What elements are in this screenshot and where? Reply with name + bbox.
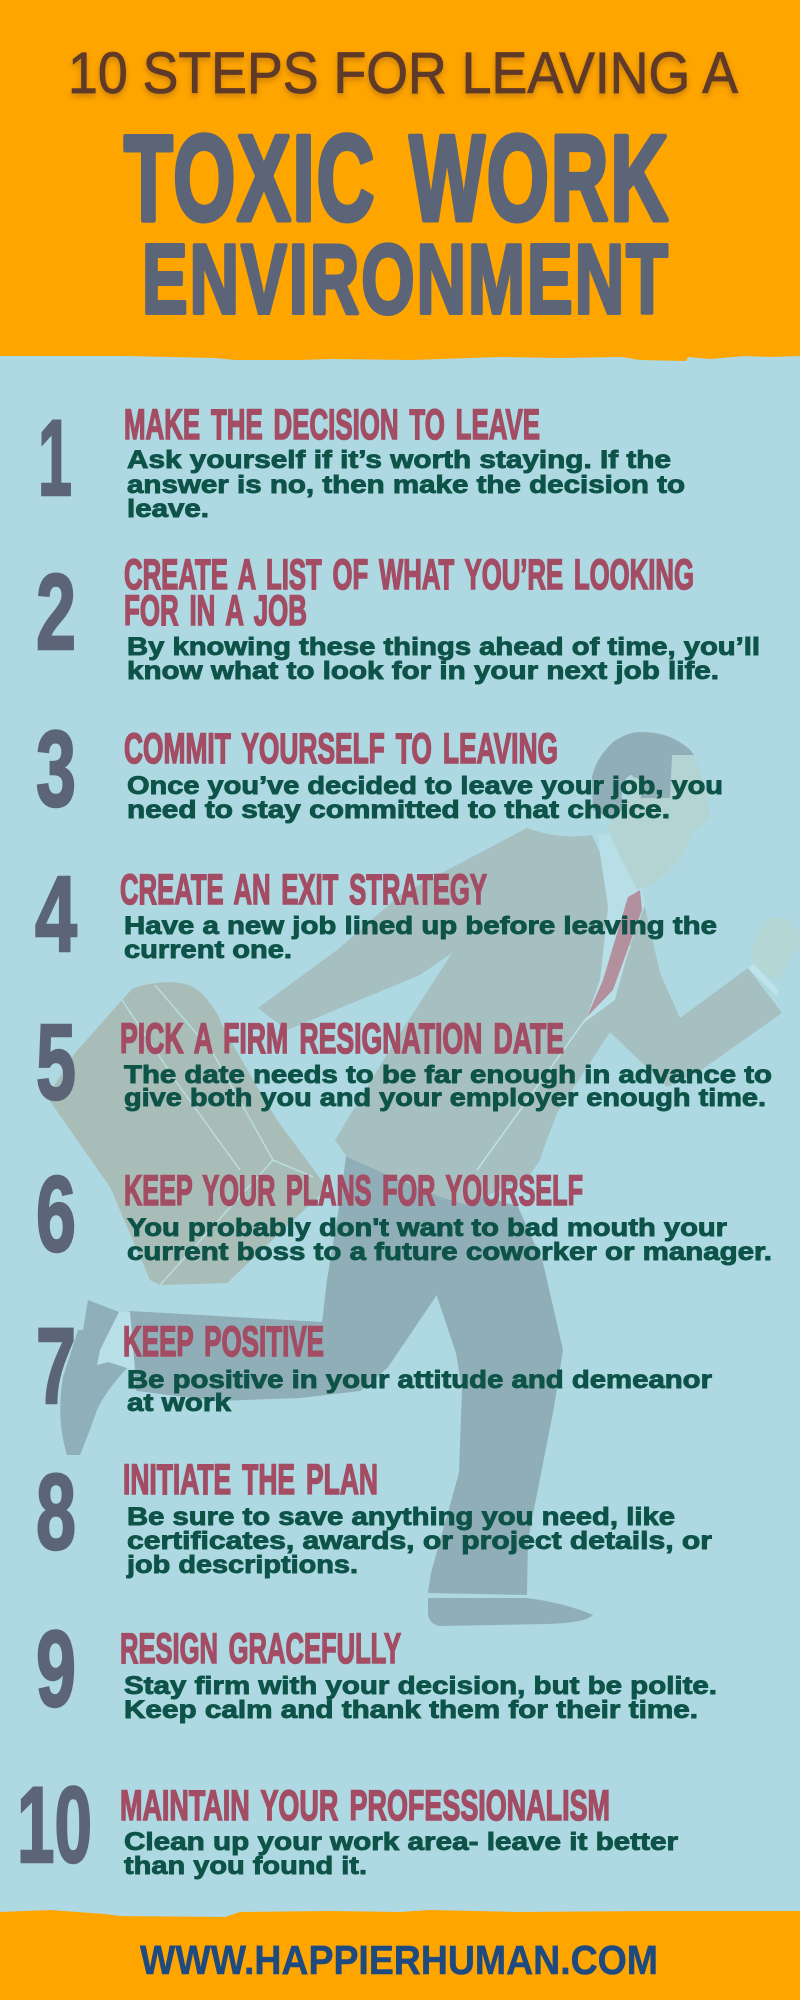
- step text: need to stay committed to that choice.: [127, 796, 670, 824]
- jacket: [258, 828, 782, 1205]
- step text: Keep calm and thank them for their time.: [124, 1696, 698, 1724]
- step text: answer is no, then make the decision to: [127, 471, 685, 499]
- step number: 3: [36, 708, 76, 829]
- title line: 10 steps: 10 STEPS FOR LEAVING A: [68, 41, 738, 106]
- step text: Stay firm with your decision, but be polite.: [124, 1672, 717, 1700]
- step 8: [36, 1451, 712, 1579]
- step text: current one.: [124, 936, 292, 964]
- step heading: [124, 551, 694, 635]
- step 10: [17, 1764, 678, 1885]
- step number: 8: [36, 1451, 76, 1572]
- step heading: INITIATE THE PLAN: [123, 1456, 378, 1504]
- step text: certificates, awards, or project details, or: [127, 1527, 712, 1555]
- tie: [587, 890, 642, 1017]
- hair: [592, 732, 694, 820]
- step text: [127, 772, 723, 824]
- step text: [124, 1061, 772, 1112]
- shirt: [585, 834, 645, 1022]
- step text: [126, 1503, 712, 1579]
- step text: Once you’ve decided to leave your job, you: [127, 772, 723, 800]
- step text: [127, 1214, 772, 1266]
- step text: Have a new job lined up before leaving the: [124, 912, 717, 940]
- step text: [124, 912, 717, 964]
- step text: than you found it.: [124, 1852, 367, 1880]
- step 5: [36, 1001, 772, 1122]
- back shoe: [60, 1300, 127, 1455]
- step number: 9: [36, 1608, 76, 1729]
- illustration: running businessman: [47, 732, 800, 1626]
- step number: 6: [36, 1153, 76, 1274]
- step number: 2: [36, 551, 76, 672]
- step number: 5: [36, 1001, 76, 1122]
- step number: 7: [36, 1305, 76, 1426]
- face: [610, 755, 708, 888]
- step text: Ask yourself if it’s worth staying. If the: [127, 446, 671, 474]
- step text: leave.: [127, 495, 209, 523]
- background panel: [0, 340, 800, 1930]
- step text: You probably don't want to bad mouth your: [127, 1214, 727, 1242]
- step text: [127, 446, 685, 523]
- step text: job descriptions.: [126, 1551, 358, 1579]
- step text: [127, 1366, 712, 1417]
- trousers: [130, 1157, 562, 1594]
- footer band: [0, 1910, 800, 2000]
- step text: The date needs to be far enough in advance to: [124, 1061, 772, 1089]
- step text: [127, 633, 760, 685]
- step 1: [38, 397, 685, 523]
- briefcase: [47, 982, 325, 1285]
- step 7: [36, 1305, 712, 1426]
- step number: 10: [17, 1764, 92, 1885]
- step text: give both you and your employer enough time.: [124, 1084, 766, 1112]
- step text: current boss to a future coworker or manager.: [127, 1238, 772, 1266]
- step 2: [36, 551, 760, 685]
- step text: Clean up your work area- leave it better: [124, 1828, 678, 1856]
- step heading: KEEP POSITIVE: [123, 1318, 324, 1366]
- step 3: [36, 708, 723, 829]
- step 4: [35, 853, 717, 974]
- step 6: [36, 1153, 772, 1274]
- step text: Be sure to save anything you need, like: [127, 1503, 675, 1531]
- step heading: CREATE AN EXIT STRATEGY: [120, 866, 487, 914]
- footer url: WWW.HAPPIERHUMAN.COM: [140, 1937, 658, 1983]
- jacket seam: [477, 946, 630, 1170]
- step heading: FOR IN A JOB: [124, 587, 307, 635]
- back trouser cuff: [97, 1312, 135, 1370]
- step text: [124, 1828, 678, 1880]
- step text: By knowing these things ahead of time, you’ll: [127, 633, 760, 661]
- step text: [124, 1672, 717, 1724]
- hand: [753, 917, 800, 980]
- cuff: [748, 964, 779, 996]
- step heading: MAKE THE DECISION TO LEAVE: [124, 401, 540, 449]
- step text: Be positive in your attitude and demeanor: [127, 1366, 712, 1394]
- step number: 4: [35, 853, 77, 974]
- header band: [0, 0, 800, 361]
- step number: 1: [38, 397, 72, 518]
- front shoe: [428, 1598, 593, 1626]
- ear: [626, 777, 642, 803]
- step text: know what to look for in your next job life.: [127, 657, 719, 685]
- step text: at work: [127, 1389, 231, 1417]
- step heading: RESIGN GRACEFULLY: [120, 1625, 401, 1673]
- step 9: [36, 1608, 717, 1729]
